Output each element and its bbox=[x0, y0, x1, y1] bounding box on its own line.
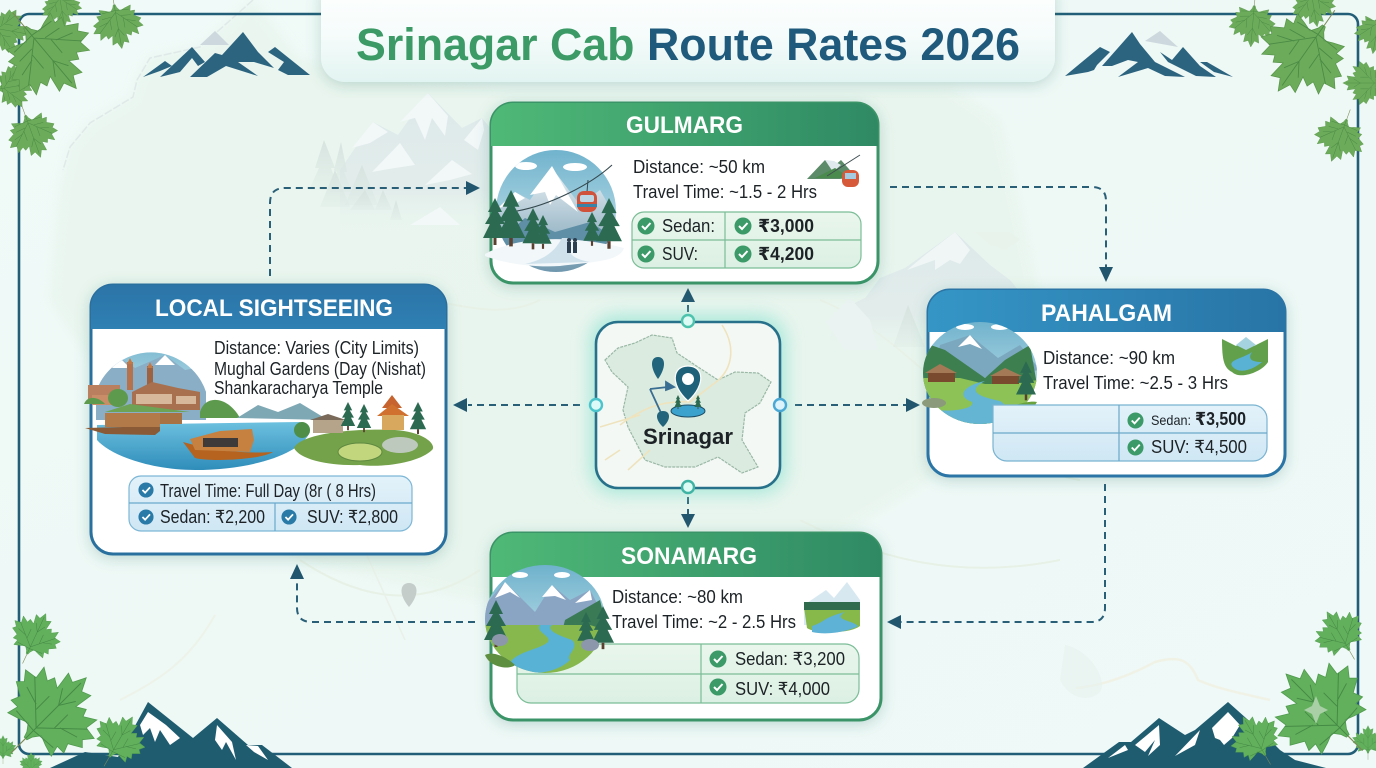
panel: Local Sightseeing bbox=[84, 285, 446, 554]
Local rates table: SUV: ₹2,800 bbox=[307, 507, 398, 527]
map roads bbox=[600, 325, 731, 470]
Pahalgam rates table: Sedan: bbox=[1151, 412, 1191, 428]
Gulmarg rates table bbox=[632, 212, 861, 268]
maple leaves top right bbox=[1227, 0, 1376, 170]
mountains bottom right bbox=[1083, 702, 1326, 768]
arrowheads bbox=[290, 181, 1113, 629]
icon: small pin bbox=[652, 357, 664, 379]
Sonamarg rates table: SUV: ₹4,000 bbox=[735, 679, 830, 699]
icon: small gondola bbox=[807, 155, 860, 187]
icon: Gulmarg cable car scene bbox=[483, 148, 624, 273]
faint mountains near Pahalgam bbox=[825, 232, 1040, 352]
panel: Srinagar centre map bbox=[590, 315, 786, 494]
Gulmarg heading: GULMARG bbox=[626, 112, 743, 139]
faint mountains left of Gulmarg bbox=[309, 93, 492, 232]
Gulmarg rates table: ₹3,000 bbox=[758, 216, 814, 236]
Gulmarg travel time: Travel Time: ~1.5 - 2 Hrs bbox=[633, 182, 817, 202]
title: Srinagar Cab Route Rates 2026 bbox=[356, 19, 1020, 70]
Pahalgam rates table: SUV: ₹4,500 bbox=[1151, 437, 1247, 457]
node: bottom bbox=[682, 481, 694, 493]
maple leaves top left bbox=[0, 0, 147, 166]
icon: small river bbox=[804, 582, 860, 633]
Gulmarg rates table: SUV: bbox=[662, 244, 698, 264]
Sonamarg header bbox=[491, 533, 881, 577]
icon: small location pin bbox=[657, 411, 669, 427]
location label: Srinagar bbox=[643, 424, 733, 449]
Pahalgam header bbox=[928, 290, 1285, 332]
maple leaves bottom right bbox=[1221, 599, 1376, 768]
mountains top right bbox=[1065, 31, 1233, 77]
Local temple: Shankaracharya Temple bbox=[214, 378, 383, 398]
node: right bbox=[774, 399, 786, 411]
Pahalgam heading: PAHALGAM bbox=[1041, 300, 1172, 327]
maple leaves bottom left bbox=[0, 603, 155, 768]
mountains top left bbox=[143, 31, 310, 77]
Gulmarg rates table: ₹4,200 bbox=[758, 244, 814, 264]
map of Kashmir region bbox=[605, 335, 771, 473]
icon: Pahalgam valley scene bbox=[922, 322, 1037, 424]
Local rates table bbox=[129, 476, 412, 531]
node: top bbox=[682, 315, 694, 327]
Pahalgam travel time: Travel Time: ~2.5 - 3 Hrs bbox=[1043, 373, 1228, 393]
icon: main location pin bbox=[675, 366, 701, 401]
Local Sightseeing heading: LOCAL SIGHTSEEING bbox=[155, 295, 393, 322]
Sonamarg heading: SONAMARG bbox=[621, 543, 757, 570]
panel: Pahalgam bbox=[920, 290, 1285, 476]
panel: Sonamarg bbox=[484, 533, 881, 720]
icon: lake with trees bbox=[671, 395, 705, 417]
Gulmarg distance: Distance: ~50 km bbox=[633, 157, 765, 177]
Sonamarg rates table: Sedan: ₹3,200 bbox=[735, 649, 845, 669]
Sonamarg distance: Distance: ~80 km bbox=[612, 587, 743, 607]
Pahalgam rates table: ₹3,500 bbox=[1195, 409, 1246, 429]
icon: faint map pin bbox=[401, 583, 417, 607]
Sonamarg rates table bbox=[517, 644, 859, 703]
Local rates table: Sedan: ₹2,200 bbox=[160, 507, 265, 527]
Pahalgam rates table bbox=[993, 405, 1267, 461]
Local distance: Distance: Varies (City Limits) bbox=[214, 338, 419, 358]
route lines bbox=[650, 382, 674, 415]
icon: small valley bbox=[1222, 337, 1268, 375]
panel: Gulmarg bbox=[483, 103, 878, 283]
dashed route arrows bbox=[270, 187, 1106, 622]
Local gardens: Mughal Gardens (Day (Nishat) bbox=[214, 359, 426, 379]
node: left bbox=[590, 399, 602, 411]
icon: Dal Lake scene bbox=[84, 352, 434, 470]
Local rates table: Travel Time: Full Day (8r ( 8 Hrs) bbox=[160, 481, 376, 501]
Sonamarg travel time: Travel Time: ~2 - 2.5 Hrs bbox=[612, 612, 796, 632]
Gulmarg rates table: Sedan: bbox=[662, 216, 715, 236]
Local Sightseeing header bbox=[91, 285, 446, 329]
title panel bbox=[321, 0, 1055, 82]
mountains bottom left bbox=[50, 702, 292, 768]
Local city buildings bbox=[84, 358, 328, 420]
Pahalgam distance: Distance: ~90 km bbox=[1043, 348, 1175, 368]
icon: Sonamarg river scene bbox=[484, 565, 614, 680]
Gulmarg header bbox=[491, 103, 878, 146]
